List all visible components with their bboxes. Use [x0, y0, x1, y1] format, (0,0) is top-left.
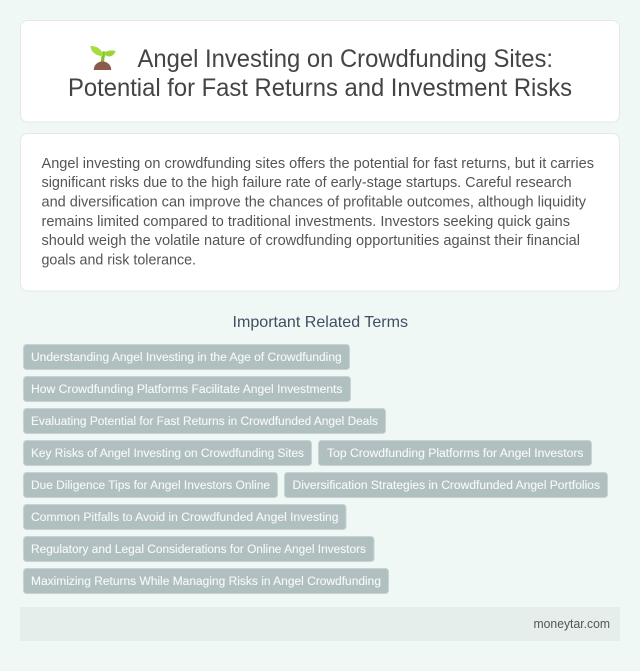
- chip: maximizing returns: Maximizing Returns While Managing Risks in Angel Crowdfunding: [31, 574, 381, 588]
- title: Potential for Fast Returns and Investment Risks: [68, 74, 572, 102]
- chip: understanding angel investing: [24, 344, 350, 370]
- text block: description: goals and risk tolerance.: [42, 252, 196, 268]
- text block: description: significant risks due to the high failure rate of early-stage startups. Careful research: [42, 175, 572, 191]
- chip: regulatory: Regulatory and Legal Considerations for Online Angel Investors: [31, 542, 366, 556]
- chip: due diligence: [24, 472, 278, 498]
- chip: regulatory: [24, 536, 374, 562]
- chip: top platforms: [318, 440, 592, 466]
- panel: related term chips: [24, 344, 608, 594]
- panel: description card: [20, 134, 620, 291]
- chip: how platforms facilitate: [24, 376, 350, 402]
- text block: description: Angel investing on crowdfunding sites offers the potential for fast returns, but it carries: [42, 156, 594, 172]
- chip: understanding angel investing: Understanding Angel Investing in the Age of Crowdfunding: [31, 350, 342, 364]
- chip: due diligence: Due Diligence Tips for Angel Investors Online: [31, 478, 270, 492]
- text block: description: remains limited compared to traditional investments. Investors seeking quick gains: [42, 214, 570, 230]
- title: Angel Investing on Crowdfunding Sites:: [138, 45, 553, 73]
- chip: maximizing returns: [24, 568, 388, 594]
- chip: evaluating potential: Evaluating Potential for Fast Returns in Crowdfunded Angel Deals: [31, 414, 378, 428]
- footer: [20, 607, 620, 641]
- panel: title card: [20, 20, 620, 122]
- chip: common pitfalls: Common Pitfalls to Avoid in Crowdfunded Angel Investing: [31, 510, 339, 524]
- icon: sprout: [90, 46, 116, 70]
- chip: top platforms: Top Crowdfunding Platforms for Angel Investors: [327, 446, 584, 460]
- chip: key risks: [24, 440, 312, 466]
- chip: how platforms facilitate: How Crowdfunding Platforms Facilitate Angel Investments: [31, 382, 342, 396]
- chip: key risks: Key Risks of Angel Investing on Crowdfunding Sites: [31, 446, 304, 460]
- chip: diversification: Diversification Strategies in Crowdfunded Angel Portfolios: [292, 478, 600, 492]
- text block: description: and diversification can improve the chances of profitable outcomes, although liquidity: [42, 194, 587, 210]
- heading: important related terms: Important Related Terms: [232, 314, 408, 331]
- text block: description: [42, 156, 594, 268]
- chip: evaluating potential: [24, 408, 386, 434]
- chip: diversification: [284, 472, 608, 498]
- footer: source: moneytar.com: [534, 616, 610, 631]
- text block: description: should weigh the volatile nature of crowdfunding opportunities against their financial: [42, 233, 580, 249]
- title: [68, 45, 572, 102]
- chip: common pitfalls: [24, 504, 346, 530]
